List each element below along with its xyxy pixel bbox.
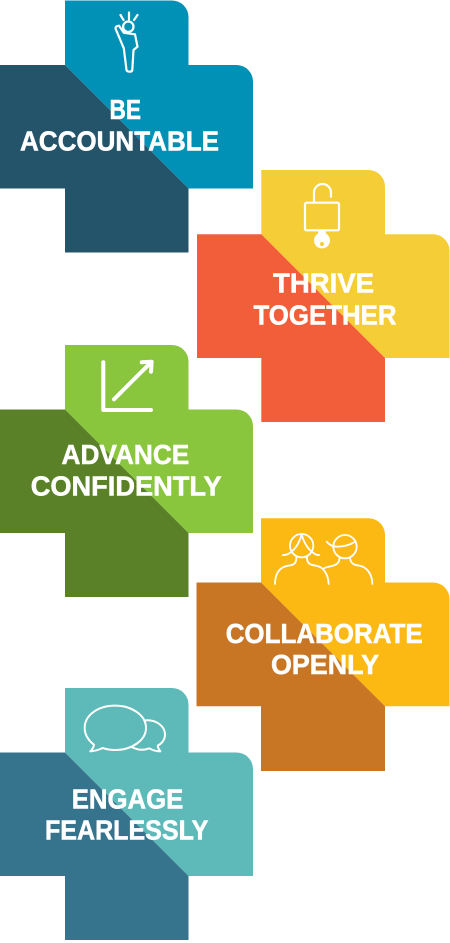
heading: advance confidently: [31, 439, 222, 501]
heading: thrive together: TOGETHER: [254, 299, 397, 330]
heading: engage fearlessly: ENGAGE: [72, 784, 183, 815]
panel: thrive together: [197, 170, 450, 422]
heading: thrive together: [254, 268, 397, 330]
cross dark half: [196, 582, 385, 771]
heading: collaborate openly: [226, 618, 423, 680]
heading: engage fearlessly: FEARLESSLY: [45, 815, 208, 846]
heading: be accountable: ACCOUNTABLE: [20, 126, 219, 156]
panel: collaborate openly: [196, 518, 450, 771]
icon: growth arrow on axes: [103, 362, 152, 410]
icon: person raising hand: [116, 12, 138, 72]
cross light half: [65, 688, 253, 876]
heading: be accountable: BE: [110, 94, 141, 125]
heading: thrive together: THRIVE: [273, 268, 374, 299]
heading: advance confidently: ADVANCE: [62, 439, 189, 470]
heading: collaborate openly: OPENLY: [271, 649, 379, 680]
cross dark half: [0, 410, 188, 597]
cross dark half: [0, 752, 188, 940]
heading: collaborate openly: COLLABORATE: [226, 618, 423, 649]
icon: open padlock with key: [305, 184, 339, 248]
cross dark half: [0, 65, 188, 252]
panel: advance confidently: [0, 345, 253, 597]
heading: be accountable: [20, 94, 219, 156]
cross light half: [261, 170, 450, 358]
heading: engage fearlessly: [45, 784, 208, 846]
panel: be accountable: [0, 0, 253, 252]
icon: speech bubbles: [85, 706, 165, 751]
panel: engage fearlessly: [0, 688, 253, 940]
cross dark half: [197, 234, 385, 422]
cross light half: [65, 0, 253, 188]
cross light half: [65, 345, 253, 533]
cross light half: [261, 518, 450, 706]
icon: two people: [275, 534, 372, 584]
heading: advance confidently: CONFIDENTLY: [31, 470, 222, 501]
